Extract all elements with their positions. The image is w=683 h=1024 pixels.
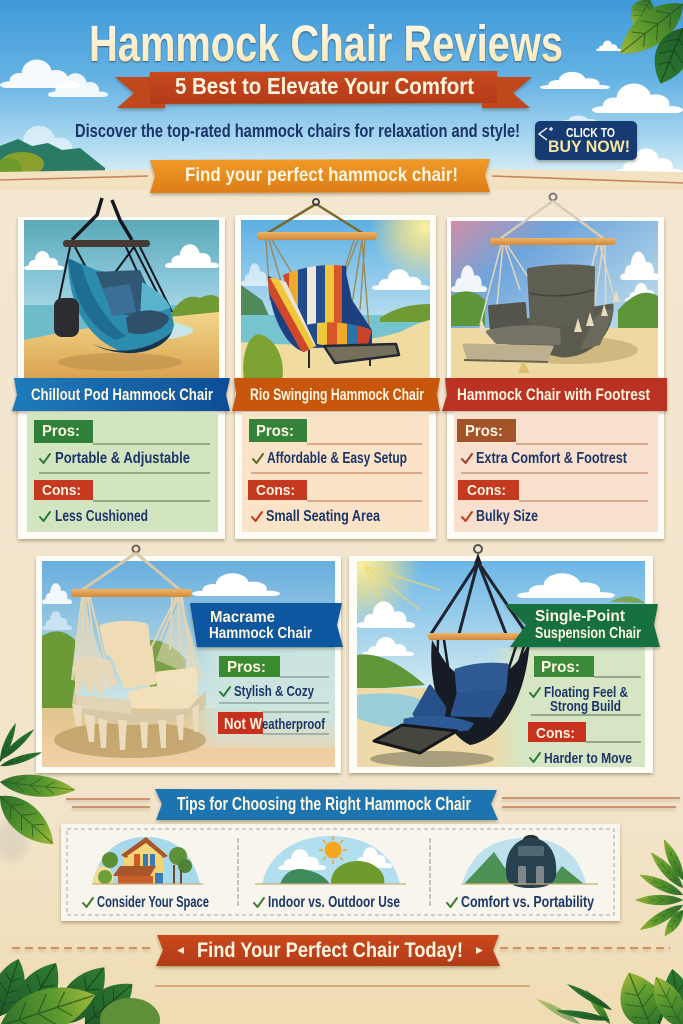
pros and cons list: Not W [224, 716, 262, 733]
tip text: indoor vs outdoor: Indoor vs. Outdoor Use [268, 894, 400, 911]
product scene: beach background [42, 561, 335, 767]
pros and cons list: Pros: [465, 423, 503, 440]
panel: buying tips [61, 824, 620, 921]
chair: striped [257, 199, 399, 368]
title ribbon: Single-Point [535, 608, 626, 625]
title ribbon [442, 378, 667, 411]
pros and cons list: Pros: [42, 423, 80, 440]
icon: fern mid right [635, 837, 683, 939]
product scene: beach background [451, 221, 660, 380]
pros and cons list: Pros: [227, 659, 266, 676]
icon: palm leaves top right [610, 0, 683, 90]
button: buy now: CLICK TO [566, 125, 615, 140]
title ribbon: Chillout Pod Hammock Chair [31, 385, 213, 404]
pros and cons list: Pros: [541, 659, 580, 676]
pros and cons list: Affordable & Easy Setup [267, 450, 407, 467]
pros and cons list: Floating Feel & [544, 684, 628, 701]
foliage bottom left [0, 953, 160, 1024]
call to action ribbon: Find Your Perfect Chair Today! [197, 939, 463, 962]
tip: consider your space [92, 837, 203, 885]
chair: navy with footrest [374, 545, 530, 753]
button: buy now [535, 121, 637, 160]
subtitle ribbon [115, 71, 532, 108]
product scene: beach background [241, 220, 430, 378]
pros and cons list: Strong Build [550, 698, 621, 715]
call to action ribbon [12, 935, 670, 966]
pros and cons list: Stylish & Cozy [234, 683, 315, 700]
title ribbon: Rio Swinging Hammock Chair [250, 385, 424, 404]
foliage bottom right [535, 965, 683, 1024]
title ribbon: Suspension Chair [535, 625, 641, 642]
title ribbon [12, 378, 230, 411]
header sky scene [0, 0, 683, 190]
pros and cons list [454, 412, 658, 532]
title ribbon [505, 604, 660, 647]
pros and cons list: Extra Comfort & Footrest [476, 450, 627, 467]
pros and cons list [218, 656, 329, 734]
pros and cons list [242, 412, 429, 532]
pros and cons list [27, 412, 218, 532]
title ribbon [190, 603, 343, 647]
tips heading ribbon: Tips for Choosing the Right Hammock Chair [177, 794, 471, 814]
panel: macrame hammock chair [36, 546, 343, 773]
tip: indoor vs outdoor [255, 834, 406, 886]
panel: hammock chair with footrest [442, 194, 667, 539]
panel: chillout pod hammock chair [12, 198, 230, 539]
title ribbon: Macrame [210, 609, 275, 626]
tip: comfort vs portability [460, 835, 598, 888]
pros and cons list: Small Seating Area [266, 508, 380, 525]
pros and cons list: Cons: [42, 482, 81, 499]
tip text: comfort vs portability: Comfort vs. Portability [461, 894, 594, 911]
product scene: beach background [24, 220, 219, 380]
chair: blue pod [54, 198, 174, 353]
pros and cons list: Pros: [256, 423, 294, 440]
pros and cons list: Portable & Adjustable [55, 450, 190, 467]
chair: grey with footrest [464, 194, 620, 373]
pros and cons list: Cons: [256, 482, 295, 499]
title ribbon [232, 378, 440, 411]
title: Hammock Chair Reviews [89, 15, 563, 72]
pros and cons list: Harder to Move [544, 750, 632, 767]
intro text: Discover the top-rated hammock chairs for relaxation and style! [75, 121, 520, 141]
icon: palm leaves mid left [0, 722, 77, 862]
product scene: beach background [357, 561, 645, 767]
tip text: consider your space: Consider Your Space [97, 894, 209, 911]
pros and cons list [528, 656, 641, 767]
tips heading ribbon [66, 789, 680, 820]
subtitle ribbon: 5 Best to Elevate Your Comfort [175, 73, 474, 99]
pros and cons list: Cons: [536, 725, 575, 742]
section banner: find your chair [150, 159, 490, 193]
tip text: consider your space [83, 894, 209, 911]
chair: macrame [71, 546, 206, 750]
panel: rio swinging hammock chair [230, 198, 442, 543]
pros and cons list: Cons: [467, 482, 506, 499]
section banner: find your chair: Find your perfect hammock chair! [185, 164, 458, 186]
pros and cons list: Less Cushioned [55, 508, 148, 525]
pros and cons list: Bulky Size [476, 508, 538, 525]
panel: single-point suspension chair [347, 544, 662, 777]
title ribbon: Hammock Chair [209, 625, 312, 642]
button: buy now: BUY NOW! [548, 137, 630, 156]
pros and cons list: eatherproof [262, 716, 326, 733]
